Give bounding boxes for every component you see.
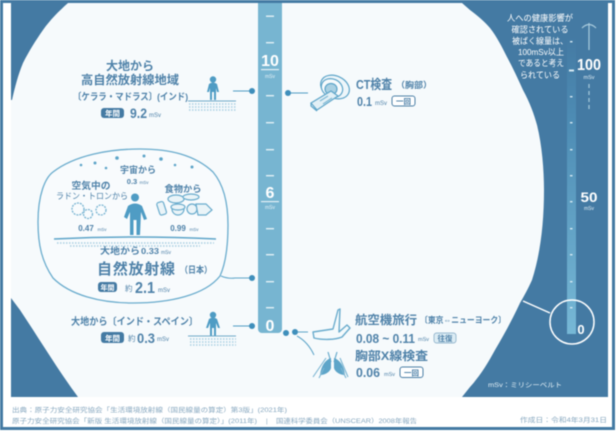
connectors: flight and x-ray to scale (283, 329, 314, 355)
item: chest x-ray (355, 348, 428, 380)
value: annual 2.1 mSv: 約 (125, 283, 133, 293)
item: flight: 0.08 ~ 0.11 (356, 331, 415, 346)
label: from ground: 大地から (100, 245, 140, 256)
label: food: mSv (190, 227, 199, 232)
value: annual 2.1 mSv (98, 280, 170, 297)
item: India and Spain: 年間 (105, 333, 120, 343)
icon: food (156, 194, 212, 216)
item: Kerala high natural radiation area: mSv (149, 113, 161, 119)
footer: sources: 国連科学委員会（UNSCEAR）2008年報告 (276, 416, 417, 425)
item: chest x-ray: 0.06 (356, 365, 380, 380)
icon: CT scanner (311, 71, 353, 111)
scale label: 0: 0 (266, 318, 275, 335)
item: Kerala high natural radiation area: 9.2 (130, 105, 147, 121)
item: flight: 航空機旅行 (355, 312, 417, 327)
footer: sources: 出典：原子力安全研究協会「生活環境放射線（国民線量の算定）第3版」(2021年) (12, 405, 287, 414)
item: flight: 往復 (438, 333, 453, 343)
callout: 100 mSv note: 人への健康影響が (507, 13, 573, 23)
label: food: 0.99 (170, 224, 186, 233)
item: CT scan: 一回 (396, 97, 411, 106)
main dose scale bar: mSv (265, 74, 276, 80)
icon: lungs (313, 352, 348, 378)
label: cosmic rays: 0.3 (127, 177, 137, 186)
zoom circle: magnified range (523, 300, 594, 344)
item: chest x-ray: mSv (384, 372, 395, 378)
heading: natural radiation Japan: （日本） (180, 264, 212, 275)
label: cosmic rays: 宇宙から (120, 164, 156, 175)
main dose scale bar (258, 3, 282, 335)
callout: 100 mSv note (507, 13, 573, 80)
item: India and Spain: 大地から〔インド・スペイン〕 (71, 315, 198, 328)
item: chest x-ray: 一回 (404, 368, 419, 378)
right scale bar: mSv (584, 206, 594, 212)
light central circle (11, 3, 544, 397)
icon: person on ground, Kerala (188, 76, 236, 110)
label: food: 食物から (164, 183, 202, 194)
item: Kerala high natural radiation area: 〔ケララ・マドラス〕(インド) (73, 91, 188, 103)
item: CT scan: 0.1 (357, 94, 372, 109)
connector: CT to scale (285, 90, 308, 96)
item: CT scan: mSv (375, 101, 387, 107)
item: flight: 〔東京⇔ニューヨーク〕 (420, 315, 506, 325)
item: flight: mSv (418, 337, 429, 343)
scale label: 100: 100 (577, 57, 601, 74)
scale label: 0: 0 (577, 322, 585, 337)
icon: radon clouds (72, 203, 106, 218)
callout: 100 mSv note: であると考え (518, 58, 564, 68)
right scale bar (567, 23, 601, 337)
footer: creation date: 作成日：令和4年3月31日 (520, 415, 607, 424)
item: Kerala high natural radiation area: 年間 (105, 108, 120, 118)
arrow: upward dose axis (582, 23, 596, 109)
heading: natural radiation Japan: 自然放射線 (97, 260, 175, 278)
connector: India and Spain to scale (233, 323, 255, 329)
label: radon in air: ラドン・トロンから (56, 191, 128, 201)
label: radon in air: mSv (98, 227, 107, 232)
connector: natural radiation to scale (221, 275, 255, 281)
label: cosmic rays: mSv (140, 180, 149, 185)
label: food (164, 183, 202, 233)
item: chest x-ray: 胸部X線検査 (355, 348, 428, 363)
scale label: 10: 10 (261, 53, 279, 70)
icon: airplane (313, 309, 350, 339)
connector: Kerala to scale (233, 88, 255, 94)
main dose scale bar: mSv (265, 205, 276, 211)
item: Kerala high natural radiation area (73, 58, 188, 121)
item: flight (355, 312, 506, 346)
label: from ground: mSv (161, 250, 172, 256)
footer: sources (12, 405, 417, 425)
value: annual 2.1 mSv: 年間 (100, 283, 114, 292)
callout: 100 mSv note: 被ばく線量は、 (512, 36, 568, 46)
label: radon in air (56, 180, 128, 233)
right scale bar: mSv (584, 75, 595, 81)
item: Kerala high natural radiation area: 高自然放射線地域 (81, 72, 179, 87)
value: annual 2.1 mSv: mSv (158, 288, 170, 294)
item: India and Spain: mSv (157, 337, 169, 343)
label: radon in air: 空気中の (72, 180, 110, 192)
scale label: 6: 6 (266, 185, 275, 202)
scale label: 50: 50 (580, 189, 598, 205)
item: Kerala high natural radiation area: 大地から (106, 58, 154, 73)
icon: person on ground, India and Spain (188, 312, 236, 345)
footer: sources: | (266, 418, 268, 425)
panel: natural radiation bubble (38, 149, 228, 303)
ground (54, 237, 216, 246)
icon: person (124, 194, 147, 235)
value: annual 2.1 mSv: 2.1 (135, 280, 155, 297)
callout: 100 mSv note: られている (520, 70, 560, 80)
heading: natural radiation Japan (97, 260, 212, 278)
label: cosmic rays (120, 164, 156, 186)
item: India and Spain: 0.3 (137, 330, 155, 346)
item: India and Spain: 約 (128, 333, 136, 343)
callout: 100 mSv note: 確認されている (512, 24, 568, 34)
item: CT scan: （胸部） (396, 80, 432, 90)
label: radon in air: 0.47 (78, 224, 94, 233)
label: from ground: 0.33 (141, 246, 159, 256)
item: CT scan: CT検査 (356, 77, 392, 92)
legend: mSv definition: mSv：ミリシーベルト (488, 381, 562, 389)
item: CT scan (356, 77, 432, 109)
stars (80, 154, 194, 169)
label: from ground (100, 245, 172, 256)
footer: sources: 原子力安全研究協会「新版 生活環境放射線（国民線量の算定）」(2011年) (12, 416, 257, 425)
item: India and Spain (71, 315, 198, 346)
callout: 100 mSv note: 100mSv以上 (518, 47, 564, 57)
